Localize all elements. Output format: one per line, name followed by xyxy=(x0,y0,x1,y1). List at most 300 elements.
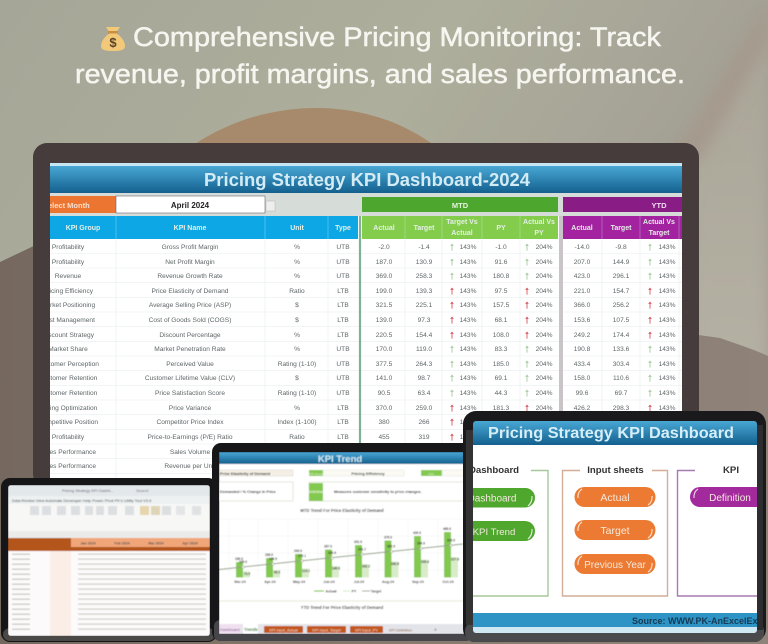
YTD values: 143% xyxy=(659,244,676,251)
MTD values: 204% xyxy=(536,346,553,353)
month labels: Sep-24 xyxy=(412,580,424,584)
ribbon xyxy=(8,485,210,538)
KPI group column: Sales Performance xyxy=(40,449,96,456)
MTD values: ↑ xyxy=(524,402,530,414)
data labels: 150.0 xyxy=(235,557,243,561)
navigation screen xyxy=(473,421,757,633)
unit and type columns: UTB xyxy=(336,375,350,382)
MTD values: 143% xyxy=(460,259,477,266)
unit and type columns: UTB xyxy=(336,244,350,251)
formula and definition: Demanded / % Change in Price xyxy=(220,490,276,494)
MTD values: ↑ xyxy=(524,270,530,282)
unit and type columns: $ xyxy=(295,463,299,470)
MTD values: 44.3 xyxy=(495,390,508,397)
KPI name column: Sales Volume xyxy=(170,449,210,456)
month labels: Oct-24 xyxy=(442,580,454,584)
ribbon: Search xyxy=(136,488,149,493)
KPI group column: Discount Strategy xyxy=(42,332,95,339)
button: KPI Trend: KPI Trend xyxy=(473,527,515,538)
formula and definition: Measures customer sensitivity to price changes. xyxy=(334,490,422,494)
data labels: 140.6 xyxy=(332,566,340,570)
icon: money bag: $ xyxy=(109,35,117,50)
YTD values: 221.0 xyxy=(574,288,591,295)
data labels: 231.7 xyxy=(358,548,366,552)
MTD values: ↑ xyxy=(449,299,455,311)
MTD values: 143% xyxy=(460,288,477,295)
MTD values: ↑ xyxy=(449,343,455,355)
YTD values: 256.2 xyxy=(613,302,630,309)
legend: PY xyxy=(352,590,357,594)
MTD values: 130.9 xyxy=(416,259,433,266)
table header: Actual Vs xyxy=(523,219,555,226)
data labels: 119.1 xyxy=(302,569,310,573)
MTD values: 204% xyxy=(536,244,553,251)
unit and type columns: % xyxy=(294,244,300,251)
YTD values: 298.3 xyxy=(613,405,630,412)
MTD values: 220.5 xyxy=(376,332,393,339)
selector row: April 2024 xyxy=(171,201,210,210)
selector row: Select Month xyxy=(43,201,90,210)
unit and type columns: % xyxy=(294,405,300,412)
MTD values: ↑ xyxy=(524,387,530,399)
sheet tabs: KPI Input_PY xyxy=(355,628,378,632)
unit and type columns: UTB xyxy=(336,259,350,266)
unit and type columns: $ xyxy=(295,317,299,324)
panel: input sheets group: Input sheets xyxy=(587,465,644,476)
YTD values: 143% xyxy=(659,288,676,295)
MTD values: 185.0 xyxy=(493,361,510,368)
data labels: 227.8 xyxy=(451,558,459,562)
data labels: 73.5 xyxy=(244,572,250,576)
KPI group column: Profitability xyxy=(52,259,85,266)
navigation title bar: Pricing Strategy KPI Dashboard xyxy=(488,425,734,442)
data labels: 200.9 xyxy=(328,551,336,555)
data labels: 162.2 xyxy=(362,564,370,568)
MTD values: ↑ xyxy=(524,285,530,297)
YTD values: 143% xyxy=(659,361,676,368)
MTD values: ↑ xyxy=(524,358,530,370)
MTD values: 143% xyxy=(460,244,477,251)
MTD values: 143% xyxy=(460,273,477,280)
MTD values: 69.1 xyxy=(495,375,508,382)
sheet header: Apr 2024 xyxy=(182,542,198,546)
MTD values: 143% xyxy=(460,346,477,353)
MTD values: 63.4 xyxy=(418,390,431,397)
unit and type columns: UTB xyxy=(336,273,350,280)
MTD values: 157.5 xyxy=(493,302,510,309)
MTD values: 97.5 xyxy=(495,288,508,295)
MTD values: ↑ xyxy=(524,314,530,326)
month labels: Aug-24 xyxy=(382,580,394,584)
legend: Actual xyxy=(326,590,336,594)
MTD values: ↑ xyxy=(449,372,455,384)
YTD trend heading: YTD Trend For Price Elasticity of Demand xyxy=(301,605,384,610)
panel: KPI group xyxy=(678,465,768,596)
YTD values xyxy=(574,241,676,414)
selector row xyxy=(43,193,682,216)
MTD values: 258.3 xyxy=(416,273,433,280)
data labels: 375.0 xyxy=(384,536,392,540)
PY bars xyxy=(243,557,458,578)
KPI Trend title bar xyxy=(219,452,465,465)
YTD values: 143% xyxy=(659,317,676,324)
title xyxy=(75,22,685,89)
navigation title bar xyxy=(473,421,757,445)
table header: Type xyxy=(335,225,351,232)
YTD values: 110.6 xyxy=(613,375,629,382)
KPI name column xyxy=(145,244,235,470)
MTD values: 91.6 xyxy=(495,259,508,266)
MTD values: 143% xyxy=(460,302,477,309)
MTD values: 204% xyxy=(536,361,553,368)
MTD values: -2.0 xyxy=(378,244,390,251)
data labels: 205.8 xyxy=(421,560,429,564)
MTD values: 370.0 xyxy=(376,405,393,412)
MTD values: ↑ xyxy=(449,256,455,268)
data labels: 465.0 xyxy=(443,527,451,531)
MTD values: 143% xyxy=(460,375,477,382)
MTD values: 204% xyxy=(536,390,553,397)
sheet header: Feb 2024 xyxy=(114,542,130,546)
unit and type columns: Rating (1-10) xyxy=(278,390,316,397)
MTD values: 225.1 xyxy=(416,302,433,309)
sheet header: Jan 2024 xyxy=(80,542,96,546)
YTD values: 143% xyxy=(659,259,676,266)
KPI name column: Perceived Value xyxy=(166,361,214,368)
dashboard title bar xyxy=(50,166,682,193)
unit and type columns: $ xyxy=(295,375,299,382)
table header: Actual xyxy=(373,225,395,232)
unit and type columns: UTB xyxy=(336,390,350,397)
selector row: MTD xyxy=(452,201,469,210)
MTD values: ↑ xyxy=(449,241,455,253)
KPI selectors xyxy=(219,470,465,476)
MTD values: 181.3 xyxy=(493,405,510,412)
table header: Target xyxy=(649,230,670,237)
arch behind laptop xyxy=(186,108,440,150)
unit and type columns: LTB xyxy=(337,419,349,426)
MTD values: 90.5 xyxy=(378,390,391,397)
tablet bezel xyxy=(1,478,217,642)
YTD values: 143% xyxy=(659,390,676,397)
KPI group column: Cost Management xyxy=(41,317,95,324)
sheet tabs: Trends xyxy=(244,627,258,632)
selector row: YTD xyxy=(652,201,667,210)
YTD values: 296.1 xyxy=(613,273,630,280)
YTD values: 143% xyxy=(659,346,676,353)
MTD values: 204% xyxy=(536,332,553,339)
MTD values: 380 xyxy=(378,419,390,426)
unit and type columns: LTB xyxy=(337,332,349,339)
MTD values: 204% xyxy=(536,317,553,324)
table header: PY xyxy=(534,230,544,237)
data labels: 105.0 xyxy=(239,560,247,564)
YTD values: 144.9 xyxy=(613,259,630,266)
unit and type columns: UTB xyxy=(336,463,350,470)
YTD values: 207.0 xyxy=(574,259,591,266)
YTD values: ↑ xyxy=(647,270,653,282)
MTD values: 204% xyxy=(536,419,553,426)
MTD values: ↑ xyxy=(524,416,530,428)
month labels: Jul-24 xyxy=(354,580,364,584)
YTD values: 190.8 xyxy=(574,346,591,353)
YTD values: ↑ xyxy=(647,285,653,297)
actual bars xyxy=(236,532,451,578)
sheet tabs: + xyxy=(434,628,437,634)
table header: PY xyxy=(496,225,506,232)
sheet tabs: KPI Input_Target xyxy=(312,628,342,632)
MTD values: 108.0 xyxy=(493,332,510,339)
MTD values: 143% xyxy=(460,361,477,368)
excel screen xyxy=(8,485,210,636)
unit and type columns: % xyxy=(294,332,300,339)
KPI group column: Market Positioning xyxy=(41,302,95,309)
YTD values: ↑ xyxy=(647,372,653,384)
table header: Target Vs xyxy=(446,219,478,226)
unit and type columns: % xyxy=(294,259,300,266)
unit and type columns: LTB xyxy=(337,317,349,324)
unit and type columns: LTB xyxy=(337,302,349,309)
MTD values: 369.0 xyxy=(376,273,393,280)
month labels: Mar-24 xyxy=(234,580,246,584)
data labels: 325.5 xyxy=(447,538,455,542)
MTD values: ↑ xyxy=(524,372,530,384)
laptop bezel xyxy=(33,143,699,488)
MTD values: 143% xyxy=(460,434,477,441)
MTD values: 68.1 xyxy=(495,317,508,324)
MTD values: ↑ xyxy=(449,402,455,414)
unit and type columns: LTB xyxy=(337,288,349,295)
YTD values: ↑ xyxy=(647,241,653,253)
MTD values: -1.0 xyxy=(495,244,507,251)
YTD values: -9.8 xyxy=(615,244,627,251)
data labels: 136.5 xyxy=(269,557,277,561)
unit and type columns: LTB xyxy=(337,405,349,412)
unit and type columns: % xyxy=(294,273,300,280)
MTD values: 139.3 xyxy=(416,288,433,295)
YTD values: ↑ xyxy=(647,402,653,414)
YTD values: 423.0 xyxy=(574,273,591,280)
data labels: 95.5 xyxy=(274,570,280,574)
ribbon: Data Review View Automate Developer Help Power Pivot PK's Utility Tool V3.0 xyxy=(12,498,152,503)
YTD values: 99.6 xyxy=(576,390,589,397)
YTD values: ↑ xyxy=(647,314,653,326)
MTD values: ↑ xyxy=(449,285,455,297)
YTD values: ↑ xyxy=(647,329,653,341)
KPI name column: Price-to-Earnings (P/E) Ratio xyxy=(147,434,233,441)
table header: KPI Group xyxy=(66,225,100,232)
MTD values: 319 xyxy=(418,434,430,441)
KPI group column: Competitive Position xyxy=(38,419,98,426)
tablet: navigation dashboard xyxy=(450,411,768,642)
title line 1: Comprehensive Pricing Monitoring: Track xyxy=(133,22,662,52)
KPI name column: Price Satisfaction Score xyxy=(155,390,225,397)
MTD trend chart: MTD Trend For Price Elasticity of Demand xyxy=(300,508,384,513)
KPI name column: Revenue Growth Rate xyxy=(157,273,223,280)
dashboard title bar: Pricing Strategy KPI Dashboard-2024 xyxy=(204,169,531,190)
MTD values: ↑ xyxy=(524,343,530,355)
unit and type columns: $ xyxy=(295,302,299,309)
MTD values: 377.5 xyxy=(376,361,393,368)
MTD values: ↑ xyxy=(449,270,455,282)
formula and definition: Definition xyxy=(309,490,323,494)
MTD values: 204% xyxy=(536,273,553,280)
KPI name column: Price Variance xyxy=(169,405,212,412)
table header: Target xyxy=(414,225,435,232)
sheet tabs: Dashboard xyxy=(220,627,240,632)
target line xyxy=(219,544,463,570)
MTD values: 199.0 xyxy=(376,288,393,295)
MTD values: 204% xyxy=(536,375,553,382)
sheet tabs xyxy=(219,624,465,634)
KPI name column: Gross Profit Margin xyxy=(162,244,219,251)
KPI group column: Sales Performance xyxy=(40,463,96,470)
YTD values: 143% xyxy=(659,375,676,382)
laptop: KPI dashboard xyxy=(33,143,699,488)
button: Definition: Definition xyxy=(709,493,751,504)
MTD values: 143% xyxy=(460,317,477,324)
KPI name column: Competitor Price Index xyxy=(156,419,224,426)
table header: Actual xyxy=(571,225,593,232)
KPI selectors: Pricing Efficiency xyxy=(351,471,386,476)
KPI selectors: KPI Group xyxy=(309,472,323,476)
ribbon: Pricing Strategy KPI Dashb... xyxy=(62,488,114,493)
hill behind laptop xyxy=(0,243,768,644)
MTD values: ↑ xyxy=(449,416,455,428)
panel: dashboard group: Dashboard xyxy=(469,465,519,476)
YTD values: 107.5 xyxy=(613,317,630,324)
MTD values: ↑ xyxy=(524,256,530,268)
YTD values: ↑ xyxy=(647,256,653,268)
sheet columns xyxy=(50,551,71,636)
KPI group column: Customer Perception xyxy=(37,361,99,368)
sheet header: Mar 2024 xyxy=(148,542,164,546)
month labels: Jun-24 xyxy=(323,580,335,584)
KPI name column: Discount Percentage xyxy=(159,332,221,339)
data labels xyxy=(235,527,459,576)
MTD values: 143% xyxy=(460,390,477,397)
sheet tabs: KPI Input_Actual xyxy=(269,628,298,632)
tablet bezel xyxy=(212,443,474,641)
table header: KPI Name xyxy=(174,225,206,232)
KPI selectors: Price Elasticity of Demand xyxy=(220,471,271,476)
column separators xyxy=(360,216,361,479)
MTD values: 204% xyxy=(536,302,553,309)
KPI name column: Average Selling Price (ASP) xyxy=(149,302,231,309)
MTD values: 143% xyxy=(460,405,477,412)
unit and type columns xyxy=(278,244,350,439)
YTD values: 143% xyxy=(659,302,676,309)
KPI group column: Customer Retention xyxy=(39,390,98,397)
YTD values: 426.2 xyxy=(574,405,591,412)
data labels: 170.1 xyxy=(298,554,306,558)
month labels: Apr-24 xyxy=(264,580,276,584)
tablet: KPI Trend xyxy=(212,443,474,641)
KPI group column xyxy=(50,244,98,468)
MTD values: 143% xyxy=(460,332,477,339)
data labels: 262.5 xyxy=(387,544,395,548)
YTD values: 153.6 xyxy=(574,317,591,324)
YTD values: 158.0 xyxy=(574,375,591,382)
unit and type columns: LTB xyxy=(337,434,349,441)
KPI selectors: Unit xyxy=(428,472,434,476)
button: Actual: Actual xyxy=(600,492,630,504)
unit and type columns: Ratio xyxy=(289,434,305,441)
YTD values: 143% xyxy=(659,405,676,412)
sheet rows xyxy=(12,554,206,630)
MTD values: ↑ xyxy=(449,314,455,326)
MTD values: 204% xyxy=(536,405,553,412)
legend: Target xyxy=(371,590,382,594)
YTD values: ↑ xyxy=(647,343,653,355)
MTD values: 180.8 xyxy=(493,273,510,280)
sheet header xyxy=(8,538,210,551)
MTD values: 83.3 xyxy=(495,346,508,353)
MTD values: 170.0 xyxy=(376,346,393,353)
unit and type columns: Units xyxy=(289,449,305,456)
YTD values: 154.7 xyxy=(613,288,630,295)
KPI group column: Pricing Efficiency xyxy=(43,288,94,295)
YTD values: 143% xyxy=(659,332,676,339)
KPI name column: Net Profit Margin xyxy=(165,259,215,266)
MTD values: 264.3 xyxy=(416,361,433,368)
panel: dashboard group xyxy=(473,466,549,597)
unit and type columns: UTB xyxy=(336,361,350,368)
source footer xyxy=(473,613,768,633)
month labels xyxy=(234,580,454,584)
YTD values: 303.4 xyxy=(613,361,630,368)
YTD values: 366.0 xyxy=(574,302,591,309)
MTD values: 97.3 xyxy=(418,317,431,324)
YTD values: ↑ xyxy=(647,358,653,370)
data labels: 331.0 xyxy=(354,540,362,544)
sheet tabs: KPI Definition xyxy=(389,628,412,632)
MTD values: 259.0 xyxy=(416,405,433,412)
tablet: Excel sheet xyxy=(1,478,217,642)
MTD values: 204% xyxy=(536,288,553,295)
YTD values: 133.6 xyxy=(613,346,630,353)
MTD values: 98.7 xyxy=(418,375,431,382)
YTD values: 69.7 xyxy=(615,390,628,397)
MTD values: 455 xyxy=(378,434,390,441)
KPI name column: Market Penetration Rate xyxy=(154,346,226,353)
button: Dashboard: Dashboard xyxy=(468,494,516,504)
data labels: 195.0 xyxy=(265,553,273,557)
MTD values: 266 xyxy=(418,419,430,426)
MTD values: 119.0 xyxy=(416,346,432,353)
MTD values: 187.0 xyxy=(376,259,393,266)
MTD values xyxy=(376,241,553,443)
YTD values: 174.4 xyxy=(613,332,630,339)
data labels: 287.0 xyxy=(324,544,332,548)
MTD values: 141.0 xyxy=(376,375,393,382)
table header: Unit xyxy=(290,225,304,232)
MTD values: ↑ xyxy=(449,431,455,443)
KPI Trend title bar: KPI Trend xyxy=(318,454,362,465)
YTD values: ↑ xyxy=(647,299,653,311)
MTD values: 321.5 xyxy=(376,302,393,309)
table header: Actual xyxy=(451,230,473,237)
unit and type columns: % xyxy=(294,346,300,353)
legend xyxy=(314,590,382,594)
YTD values: 433.4 xyxy=(574,361,591,368)
MTD trend chart xyxy=(219,508,465,594)
KPI group column: Customer Retention xyxy=(39,375,98,382)
YTD values: -14.0 xyxy=(574,244,590,251)
formula and definition xyxy=(219,482,465,501)
panel: input sheets group xyxy=(562,465,668,596)
table header xyxy=(50,216,682,239)
